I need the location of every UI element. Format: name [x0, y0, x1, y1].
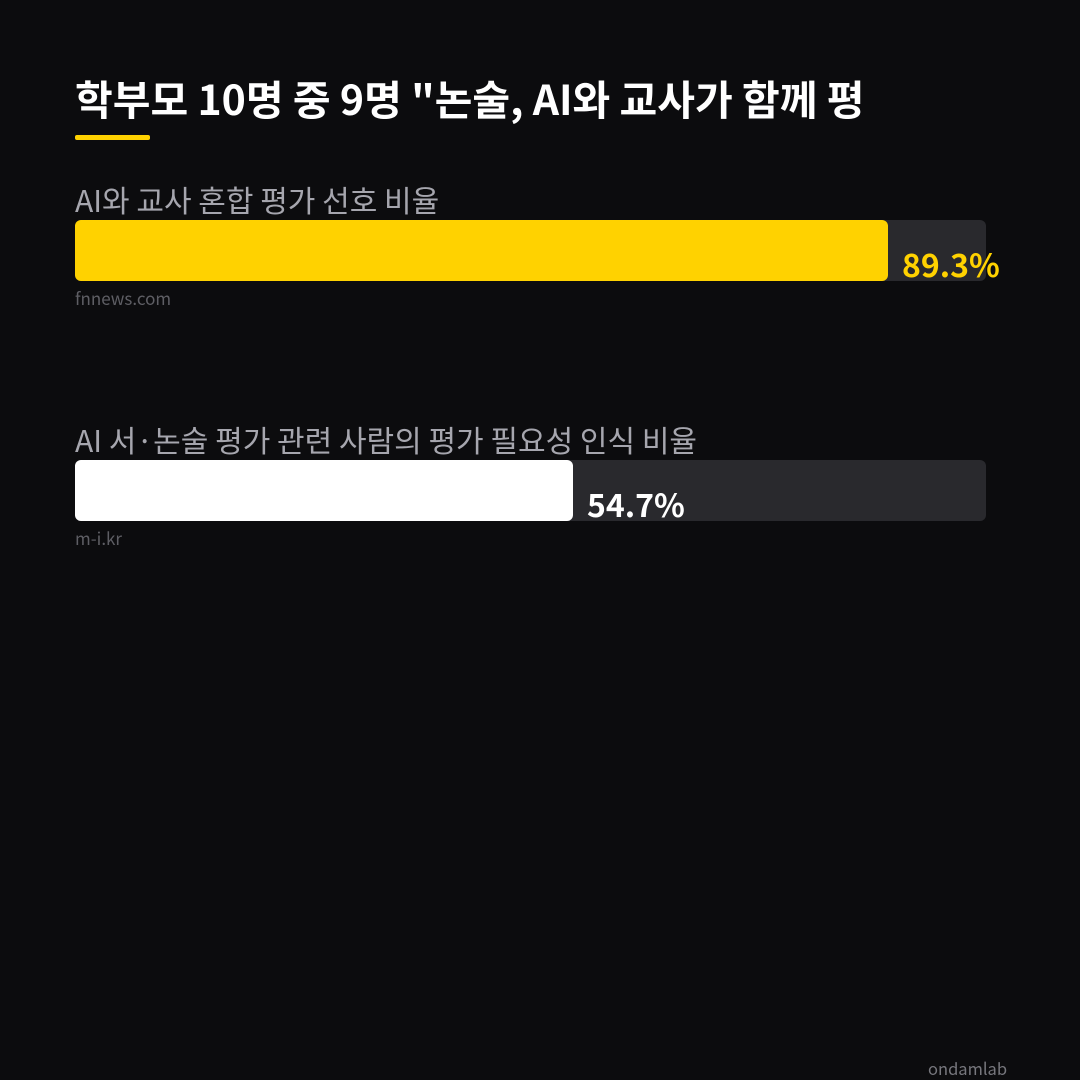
value 1: 89.3% — [902, 241, 1000, 287]
label 1: AI와 교사 혼합 평가 선호 비율 — [75, 177, 439, 221]
title: 학부모 10명 중 9명 "논술, AI와 교사가 함께 평 — [75, 67, 864, 127]
label 2: AI 서·논술 평가 관련 사람의 평가 필요성 인식 비율 — [75, 417, 697, 461]
footer brand: ondamlab — [928, 1056, 1007, 1080]
bar 1 — [75, 220, 986, 281]
value 2: 54.7% — [587, 481, 685, 527]
panel: stat 2 — [75, 417, 986, 550]
title underline — [75, 135, 150, 140]
bar 2 — [75, 460, 986, 521]
source 2: m-i.kr — [75, 525, 122, 550]
source 1: fnnews.com — [75, 285, 171, 310]
panel: stat 1 — [75, 177, 1000, 310]
